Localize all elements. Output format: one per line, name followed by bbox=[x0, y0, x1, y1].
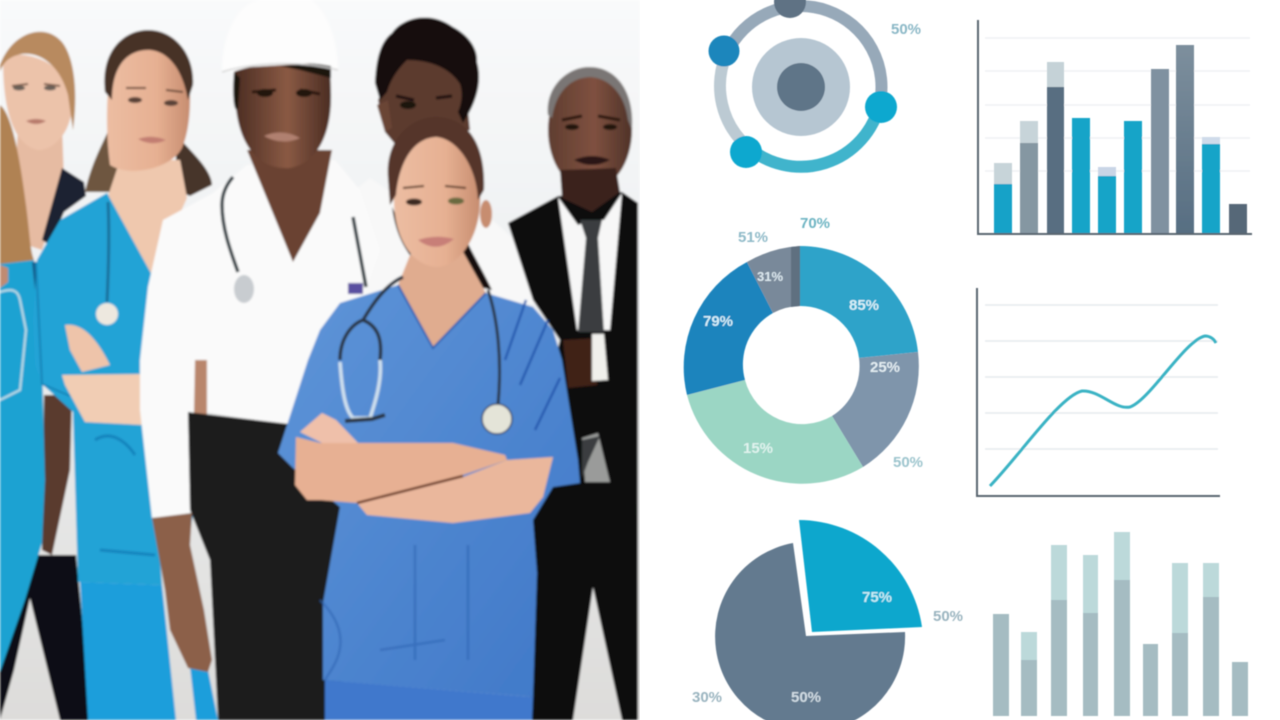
labels: donut percent values: 85% bbox=[849, 297, 879, 314]
chart: exploded pie bbox=[692, 520, 963, 720]
labels: pie percent values: 50% bbox=[933, 608, 963, 625]
chart: stacked bars top right bbox=[978, 20, 1252, 234]
person: front nurse in blue scrubs bbox=[278, 117, 580, 720]
labels: pie percent values: 75% bbox=[862, 589, 892, 606]
person: man behind far left, dark top bbox=[0, 32, 92, 720]
chart: orbit ring with dots bbox=[708, 0, 921, 168]
labels: donut percent values: 50% bbox=[893, 454, 923, 471]
chart: muted stacked bars bottom right bbox=[993, 532, 1248, 716]
chart: donut bbox=[684, 215, 923, 484]
person: engineer in white helmet and coat bbox=[140, 0, 380, 720]
chart: line chart bbox=[977, 288, 1220, 496]
panel: white chart area bbox=[640, 0, 1280, 720]
panel: photo of professionals bbox=[0, 0, 640, 720]
person: far left nurse bbox=[0, 105, 45, 672]
labels: donut percent values: 15% bbox=[743, 440, 773, 457]
labels: donut percent values bbox=[703, 215, 923, 471]
labels: donut percent values: 51% bbox=[738, 229, 768, 246]
labels: donut percent values: 79% bbox=[703, 313, 733, 330]
labels: pie percent values: 30% bbox=[692, 689, 722, 706]
labels: donut percent values: 31% bbox=[757, 269, 783, 284]
person: man in black suit bbox=[508, 67, 638, 720]
label: orbit percent: 50% bbox=[891, 21, 921, 38]
photo background bbox=[0, 0, 640, 720]
labels: donut percent values: 25% bbox=[870, 359, 900, 376]
person: back woman with afro hair bbox=[345, 17, 535, 325]
labels: pie percent values: 50% bbox=[791, 689, 821, 706]
person: woman in teal scrubs bbox=[33, 30, 218, 720]
labels: donut percent values: 70% bbox=[800, 215, 830, 232]
labels: pie percent values bbox=[692, 589, 963, 706]
